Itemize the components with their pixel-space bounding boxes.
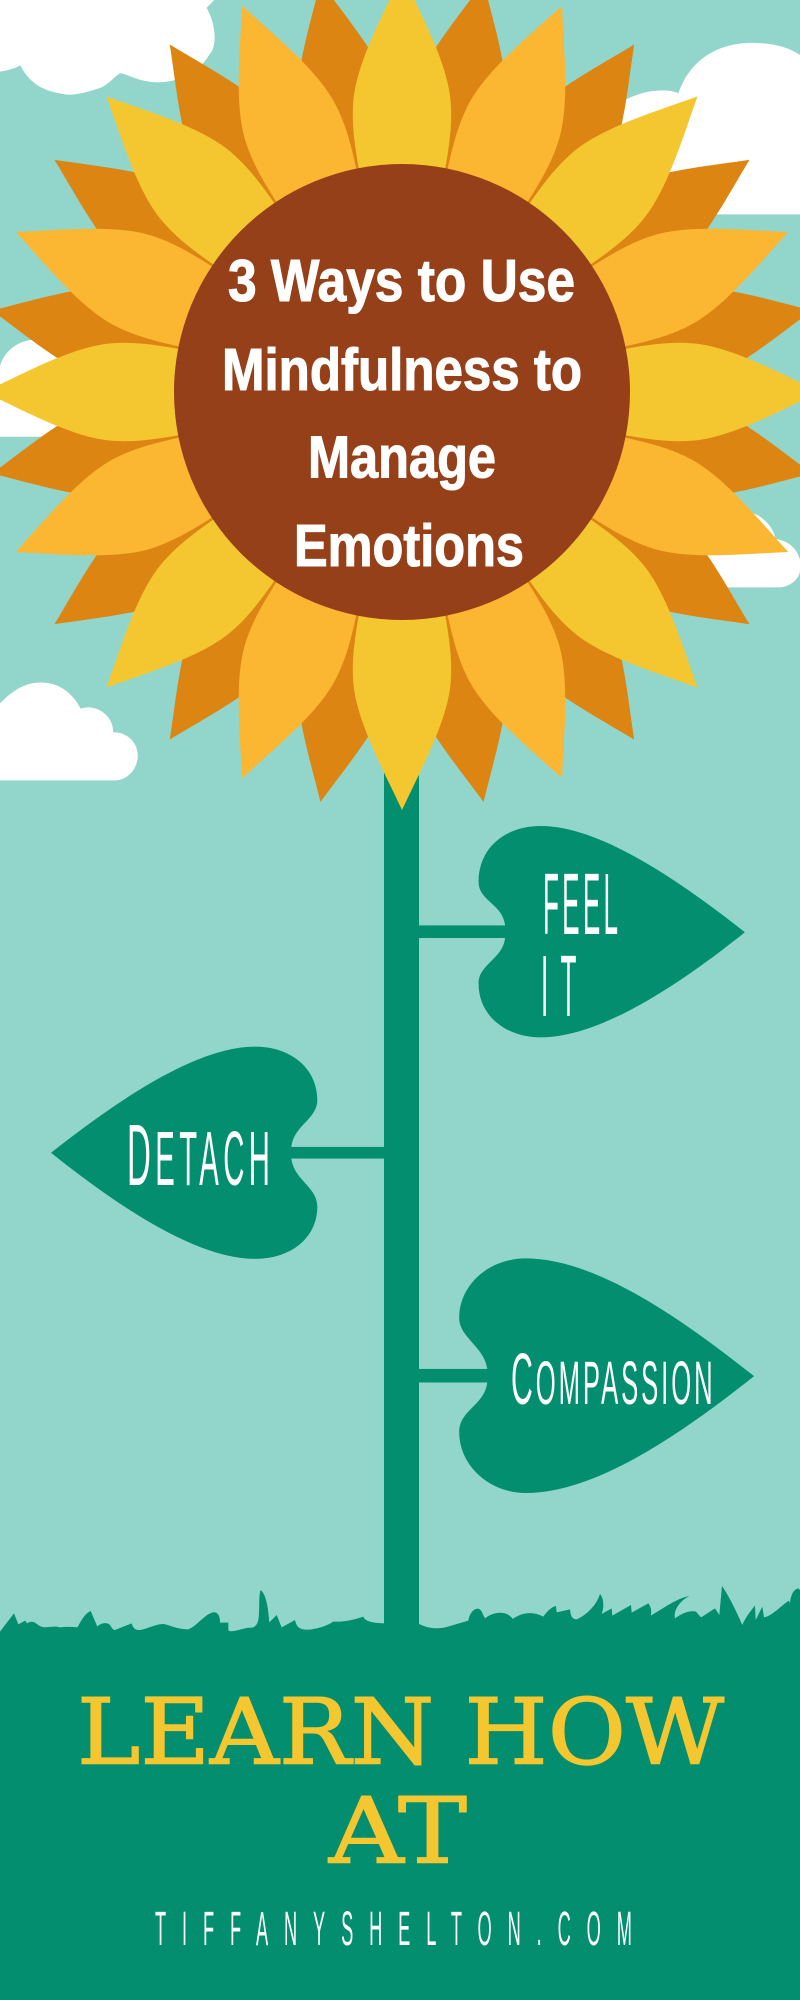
leaf: Detach: [51, 1047, 386, 1259]
title: Mindfulness to: [222, 337, 582, 403]
stem: [384, 770, 419, 1660]
grass silhouette: left: [0, 1590, 387, 1650]
cloud: lower right: [689, 511, 800, 587]
grass silhouette: right: [400, 1586, 800, 1650]
leaf: Compassion: [416, 1258, 754, 1493]
sunflower: [0, 0, 800, 812]
yellow petals: [0, 0, 800, 810]
leaf label: COMPASSION: [511, 1339, 713, 1420]
cloud: top right: [587, 43, 800, 214]
call to action: Learn how at: AT: [328, 1780, 467, 1884]
leaf label: [541, 855, 618, 1035]
leaf label: FEEL: [543, 855, 618, 953]
title: [222, 248, 582, 579]
grass and ground: [0, 1586, 800, 2000]
leaf label: DETACH: [127, 1106, 270, 1204]
clouds: [0, 0, 800, 780]
title: Emotions: [294, 513, 524, 579]
cloud: middle left: [0, 340, 61, 437]
call to action: Learn how at: [77, 1680, 724, 1884]
leaf: Feel It: [416, 826, 745, 1037]
cloud: top left: [0, 0, 215, 95]
cloud: lower left: [0, 683, 138, 780]
title: Manage: [308, 424, 496, 490]
amber petals: [0, 0, 800, 797]
call to action: Learn how at: LEARN HOW: [77, 1680, 724, 1786]
leaf label: IT: [541, 937, 576, 1035]
flower centre disc: [174, 164, 630, 620]
leaf shape and branch: [51, 1047, 386, 1259]
leaf shape and branch: [416, 1258, 754, 1493]
back orange petals: [0, 0, 800, 812]
website url: TIFFANYSHELTON.COM: [155, 1901, 632, 1956]
leaf shape and branch: [416, 826, 745, 1037]
title: 3 Ways to Use: [228, 248, 575, 314]
ground block: [0, 1648, 800, 2000]
